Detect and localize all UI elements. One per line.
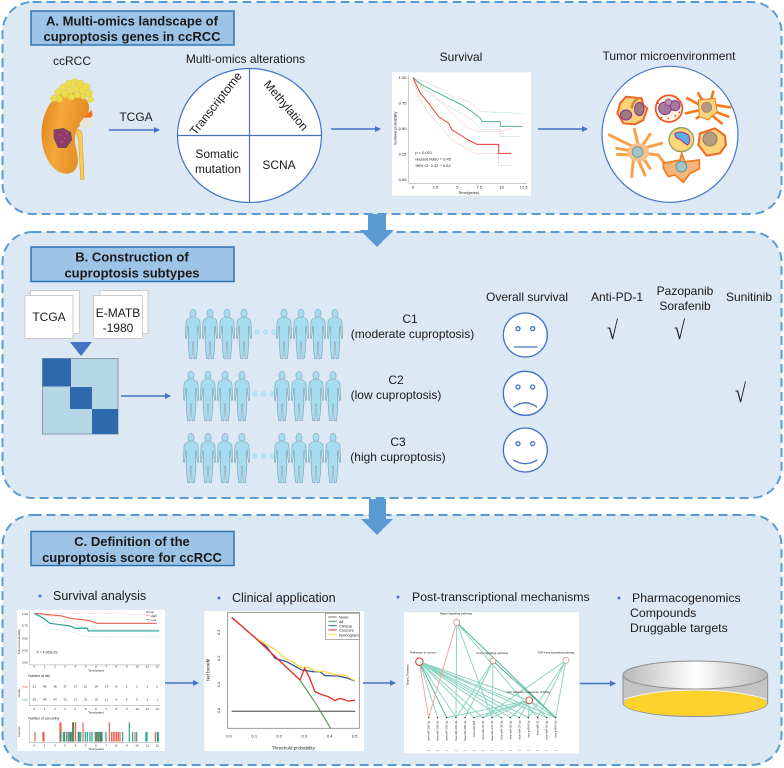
chart: miRNA pathway network: Pathways in cancer xyxy=(410,650,436,654)
label: C3: (high cuproptosis) xyxy=(350,450,446,464)
label: survival: Survival xyxy=(440,50,482,64)
chart: survival analysis: 0 xyxy=(33,665,35,669)
chart: survival analysis: 6 xyxy=(95,707,97,711)
chart: survival analysis: Low xyxy=(151,618,157,622)
chart: miRNA pathway network: hsa-miR-93-3p xyxy=(545,720,549,739)
chart: survival analysis: 2 xyxy=(54,743,56,747)
chart: survival analysis: 33 xyxy=(63,697,67,701)
chart: survival analysis: 11 xyxy=(146,665,149,669)
chart: survival analysis: 6 xyxy=(95,665,97,669)
chart: survival analysis: 12 xyxy=(156,707,159,711)
chart: miRNA pathway network: hsa-miR-183-5p xyxy=(436,720,440,741)
icon: sad face xyxy=(503,371,547,415)
chart: miRNA pathway network: hsa-miR-200-3p xyxy=(463,720,467,741)
arrow xyxy=(538,128,587,130)
card: E-MATB-1980 xyxy=(94,290,148,338)
label: C3 xyxy=(350,435,446,464)
chart: survival analysis: 4 xyxy=(74,665,76,669)
chart: survival curve: 7.5 xyxy=(477,184,483,189)
label: Pazopanib Sorafenib: Pazopanib xyxy=(657,284,714,298)
chart: decision curve: 0.2 xyxy=(277,734,283,739)
arrow xyxy=(331,128,380,130)
chart: survival analysis: 3 xyxy=(64,707,66,711)
chart: survival analysis: 8 xyxy=(115,707,117,711)
label: C1 xyxy=(351,312,474,341)
label: pharmacogenomics list: Pharmacogenomics xyxy=(632,591,741,605)
arrow xyxy=(363,682,395,684)
chart: survival analysis: 11 xyxy=(146,743,149,747)
chart: survival analysis: Low xyxy=(22,697,28,701)
chart: survival analysis: 6 xyxy=(126,697,128,701)
chart: decision curve: 0.5 xyxy=(352,734,358,739)
label: C2 xyxy=(351,373,441,402)
chart: survival analysis: Survival probability xyxy=(17,629,21,654)
chart: survival analysis: 2 xyxy=(54,665,56,669)
chart: survival analysis: 48 xyxy=(43,697,47,701)
icon: petri dish xyxy=(623,661,768,717)
chart: multi-omics circle xyxy=(178,68,322,202)
chart: miRNA pathway network: hsa-miR-4-5p xyxy=(526,720,530,738)
chart: decision curve: All xyxy=(339,619,344,624)
label: pharmacogenomics list: Compounds xyxy=(630,606,696,620)
chart: survival analysis: High xyxy=(22,685,28,689)
chart: multi-omics circle: SCNA xyxy=(262,158,296,172)
chart: survival curve: 0.50 xyxy=(399,126,407,131)
icon: kidney with tumor xyxy=(42,79,94,180)
panel: C cuproptosis score xyxy=(2,515,782,765)
chart: survival analysis: 21 xyxy=(84,685,88,689)
icon: happy face xyxy=(503,428,547,472)
chart: survival analysis: 12 xyxy=(156,665,159,669)
chart: multi-omics circle: Methylation xyxy=(261,77,311,133)
chart: decision curve: 0.1 xyxy=(252,734,258,739)
chart: decision curve: Net benefit xyxy=(205,658,210,681)
chart: survival analysis: 0 xyxy=(33,707,35,711)
chart: survival analysis: 10 xyxy=(135,665,139,669)
chart: decision curve: Cuscore xyxy=(339,628,355,633)
heading: panel A xyxy=(31,11,234,45)
label: survival analysis: Survival analysis xyxy=(53,589,146,603)
label: pharmacogenomics list xyxy=(618,591,741,635)
chart: decision curve: 0.0 xyxy=(216,707,221,713)
chart: survival analysis: 10 xyxy=(135,743,139,747)
arrow xyxy=(580,682,615,684)
chart: survival analysis: 48 xyxy=(43,685,47,689)
label: TCGA arrow: TCGA xyxy=(119,110,153,124)
chart: survival analysis: 1 xyxy=(44,707,46,711)
arrow: B to C xyxy=(361,499,393,535)
chart: survival analysis: 0.75 xyxy=(22,624,28,628)
heading: panel B xyxy=(31,247,234,282)
chart: decision curve: 0.1 xyxy=(216,681,221,687)
label: C2: C2 xyxy=(388,373,404,387)
chart: survival analysis: 11 xyxy=(105,697,108,701)
chart: miRNA pathway network: Hippo signaling pathway xyxy=(440,612,473,616)
label: Pazopanib Sorafenib xyxy=(657,284,714,313)
label: overall survival: Overall survival xyxy=(486,290,568,304)
chart: survival analysis: Time(years) xyxy=(88,711,104,715)
chart: survival analysis: 2 xyxy=(54,707,56,711)
chart: decision curve: Threshold probability xyxy=(272,745,316,750)
chart: miRNA pathway network: hsa-miR-193-3p xyxy=(454,720,458,741)
chart: survival analysis: Number of censoring xyxy=(28,716,59,720)
chart: survival analysis: 0.50 xyxy=(22,636,28,640)
chart: survival analysis: 3 xyxy=(64,665,66,669)
card: TCGA xyxy=(25,290,80,338)
chart: survival analysis: 1 xyxy=(44,665,46,669)
chart: survival analysis: Number at risk xyxy=(28,674,50,678)
chart: miRNA pathway network: hsa-miR-24-3p xyxy=(499,720,503,739)
chart: decision curve: Nomogram xyxy=(339,632,359,637)
heading: panel A: cuproptosis genes in ccRCC xyxy=(44,29,221,44)
chart: survival analysis: 23 xyxy=(84,697,88,701)
chart: survival analysis: 9 xyxy=(126,743,128,747)
label: TCGA arrow xyxy=(109,110,159,130)
chart: survival analysis: 0 xyxy=(33,743,35,747)
chart: multi-omics circle: Transcriptome xyxy=(187,69,245,138)
chart: survival analysis: 5 xyxy=(85,707,87,711)
chart: survival analysis: 27 xyxy=(74,685,77,689)
heading: panel B: B. Construction of xyxy=(75,250,189,264)
chart: survival curve: 10 xyxy=(499,184,505,189)
icon: C2 patient row xyxy=(183,371,341,421)
chart: survival analysis: Time(years) xyxy=(88,668,104,672)
panel: B cuproptosis subtypes xyxy=(2,232,782,498)
card: E-MATB-1980: E-MATB xyxy=(96,306,140,320)
chart: survival analysis: 37 xyxy=(63,685,67,689)
chart: decision curve xyxy=(204,611,364,751)
chart: survival curve: Hazard Ratio = 0.45 xyxy=(415,156,452,161)
chart: survival analysis: 5 xyxy=(85,665,87,669)
chart: miRNA pathway network: hsa-miR-9-5p xyxy=(554,720,558,738)
chart: consensus matrix xyxy=(42,358,118,434)
chart: miRNA pathway network xyxy=(404,612,579,753)
chart: survival analysis: P = 4.265e-02 xyxy=(37,651,58,655)
icon: neutral face xyxy=(503,313,547,357)
label: ccRCC: ccRCC xyxy=(53,54,91,68)
chart: survival analysis: 11 xyxy=(146,707,149,711)
chart: survival curve: 12.5 xyxy=(520,184,528,189)
chart: miRNA pathway network: TGF-beta signaling pathway xyxy=(537,651,575,655)
chart: survival analysis: 1 xyxy=(156,697,158,701)
chart: survival curve: 95% CI: 0.32 − 0.62 xyxy=(415,163,451,168)
chart: miRNA pathway network: hsa-miR-205 xyxy=(472,720,476,737)
chart: survival analysis: 9 xyxy=(126,665,128,669)
heading: panel A: A. Multi-omics landscape of xyxy=(46,14,219,28)
chart: decision curve: 0.4 xyxy=(327,734,333,739)
chart: survival curve: Survival probability xyxy=(392,112,397,145)
check: C1 Pazopanib Sorafenib: √ xyxy=(674,317,685,346)
chart: survival analysis: 38 xyxy=(53,685,57,689)
chart: miRNA pathway network: hsa-miR-27-3p xyxy=(517,720,521,739)
label: Anti-PD-1: Anti-PD-1 xyxy=(591,290,643,304)
chart: survival analysis: 0.25 xyxy=(22,649,28,653)
chart: survival curve: 0.75 xyxy=(399,101,407,106)
chart: miRNA pathway network: FoxO signaling pathway xyxy=(476,651,509,655)
label: Sunitinib: Sunitinib xyxy=(726,290,772,304)
chart: survival curve: p < 0.001 xyxy=(415,150,433,155)
chart: survival analysis: 1 xyxy=(146,685,148,689)
chart: decision curve: 0.0 xyxy=(226,734,233,739)
label: C3: C3 xyxy=(390,435,406,449)
chart: multi-omics circle: Somatic xyxy=(195,147,239,161)
chart: miRNA pathway network: Cell adhesion molecules (CAMs) xyxy=(507,690,550,694)
panel: A multi-omics landscape xyxy=(2,2,782,214)
chart: survival analysis: 51 xyxy=(33,685,36,689)
chart: survival analysis: 19 xyxy=(94,685,98,689)
chart: survival analysis: 5 xyxy=(136,697,138,701)
chart: decision curve: None xyxy=(339,615,349,620)
chart: miRNA pathway network: hsa-miR-217-3p xyxy=(490,720,494,741)
chart: miRNA pathway network: hsa-miR-192-5p xyxy=(445,720,449,741)
chart: miRNA pathway network: Target_Pathway xyxy=(405,664,409,686)
chart: survival analysis: 7 xyxy=(105,707,107,711)
chart: survival analysis: 9 xyxy=(126,707,128,711)
chart: survival analysis: 14 xyxy=(105,685,108,689)
chart: survival analysis: 1.00 xyxy=(22,612,28,616)
chart: survival analysis: High xyxy=(151,614,157,618)
chart: survival analysis: 43 xyxy=(53,697,57,701)
chart: survival analysis: Group xyxy=(146,610,155,614)
chart: decision curve: 0.3 xyxy=(302,734,308,739)
label: multi-omics alterations: Multi-omics alterations xyxy=(186,52,305,66)
heading: panel C: C. Definition of the xyxy=(74,534,190,549)
chart: survival curve: Time(years) xyxy=(458,190,480,195)
chart: survival curve: 2.5 xyxy=(433,184,439,189)
chart: survival analysis: 2 xyxy=(146,697,148,701)
chart: survival analysis: 0 xyxy=(156,685,158,689)
chart: survival analysis: 4 xyxy=(74,743,76,747)
chart: survival curve: 0 xyxy=(412,184,415,189)
chart: survival analysis: 8 xyxy=(115,685,117,689)
heading: panel C: cuproptosis score for ccRCC xyxy=(42,550,223,565)
chart: survival analysis: Time(years) xyxy=(88,747,104,751)
chart: survival analysis: 5 xyxy=(85,743,87,747)
chart: survival analysis: 3 xyxy=(64,743,66,747)
label: C2: (low cuproptosis) xyxy=(351,388,441,402)
chart: survival analysis: 55 xyxy=(33,697,36,701)
chart: survival curve xyxy=(392,72,531,196)
icon: C3 patient row xyxy=(183,433,341,483)
chart: survival curve: 1.00 xyxy=(399,75,407,80)
chart: survival curve: 5 xyxy=(456,184,459,189)
chart: miRNA pathway network: hsa-miR-182-5p xyxy=(427,720,431,741)
chart: survival analysis: 5 xyxy=(126,685,128,689)
label: C1: (moderate cuproptosis) xyxy=(351,327,474,341)
chart: decision curve: 0.3 xyxy=(216,629,221,635)
arrow xyxy=(165,682,198,684)
icon: tumor microenvironment cells xyxy=(602,66,738,202)
chart: multi-omics circle: mutation xyxy=(195,162,241,176)
chart: survival analysis: 10 xyxy=(135,707,139,711)
chart: decision curve: Clinical xyxy=(339,623,352,628)
chart: survival analysis: 7 xyxy=(105,743,107,747)
chart: survival analysis: n.censor xyxy=(17,726,21,737)
chart: survival analysis xyxy=(17,610,165,751)
chart: miRNA pathway network: hsa-miR-21-5p xyxy=(481,720,485,739)
chart: survival analysis: 12 xyxy=(156,743,159,747)
icon: C1 patient row xyxy=(185,309,343,359)
heading: panel C xyxy=(31,532,234,566)
card: E-MATB-1980: -1980 xyxy=(103,321,134,335)
chart: survival analysis: 4 xyxy=(74,707,76,711)
arrow xyxy=(121,395,170,397)
chart: miRNA pathway network: hsa-miR-25-3p xyxy=(508,720,512,739)
label: tumor microenvironment: Tumor microenvironment xyxy=(603,49,736,63)
chart: survival analysis: 27 xyxy=(74,697,77,701)
label: clinical application: Clinical application xyxy=(232,591,336,605)
chart: survival analysis: 6 xyxy=(95,743,97,747)
chart: survival curve: 0.25 xyxy=(399,152,407,157)
label: pharmacogenomics list: Druggable targets xyxy=(630,621,728,635)
chart: survival analysis: Group xyxy=(17,689,21,697)
chart: survival analysis: 1 xyxy=(44,743,46,747)
label: C1: C1 xyxy=(402,312,418,326)
chart: survival curve: 0.00 xyxy=(399,177,407,182)
chart: decision curve: 0.2 xyxy=(216,655,221,661)
chart: survival analysis: 8 xyxy=(115,743,117,747)
label: post-transcriptional mechanisms: Post-transcriptional mechanisms xyxy=(412,590,590,604)
chart: survival analysis: 19 xyxy=(94,697,98,701)
chart: survival analysis: 7 xyxy=(105,665,107,669)
card: TCGA: TCGA xyxy=(32,310,66,324)
arrow: triangle down xyxy=(70,342,92,356)
check: C2 Sunitinib: √ xyxy=(735,380,746,409)
chart: survival analysis: 0.00 xyxy=(22,661,28,665)
chart: miRNA pathway network: hsa-miR-92 xyxy=(536,720,540,735)
chart: survival analysis: 9 xyxy=(115,697,117,701)
label: Pazopanib Sorafenib: Sorafenib xyxy=(659,299,711,313)
chart: survival analysis: 8 xyxy=(115,665,117,669)
check: C1 Anti-PD-1: √ xyxy=(607,317,618,346)
arrow: A to B xyxy=(360,214,394,247)
heading: panel B: cuproptosis subtypes xyxy=(64,266,200,280)
chart: survival analysis: 2 xyxy=(136,685,138,689)
